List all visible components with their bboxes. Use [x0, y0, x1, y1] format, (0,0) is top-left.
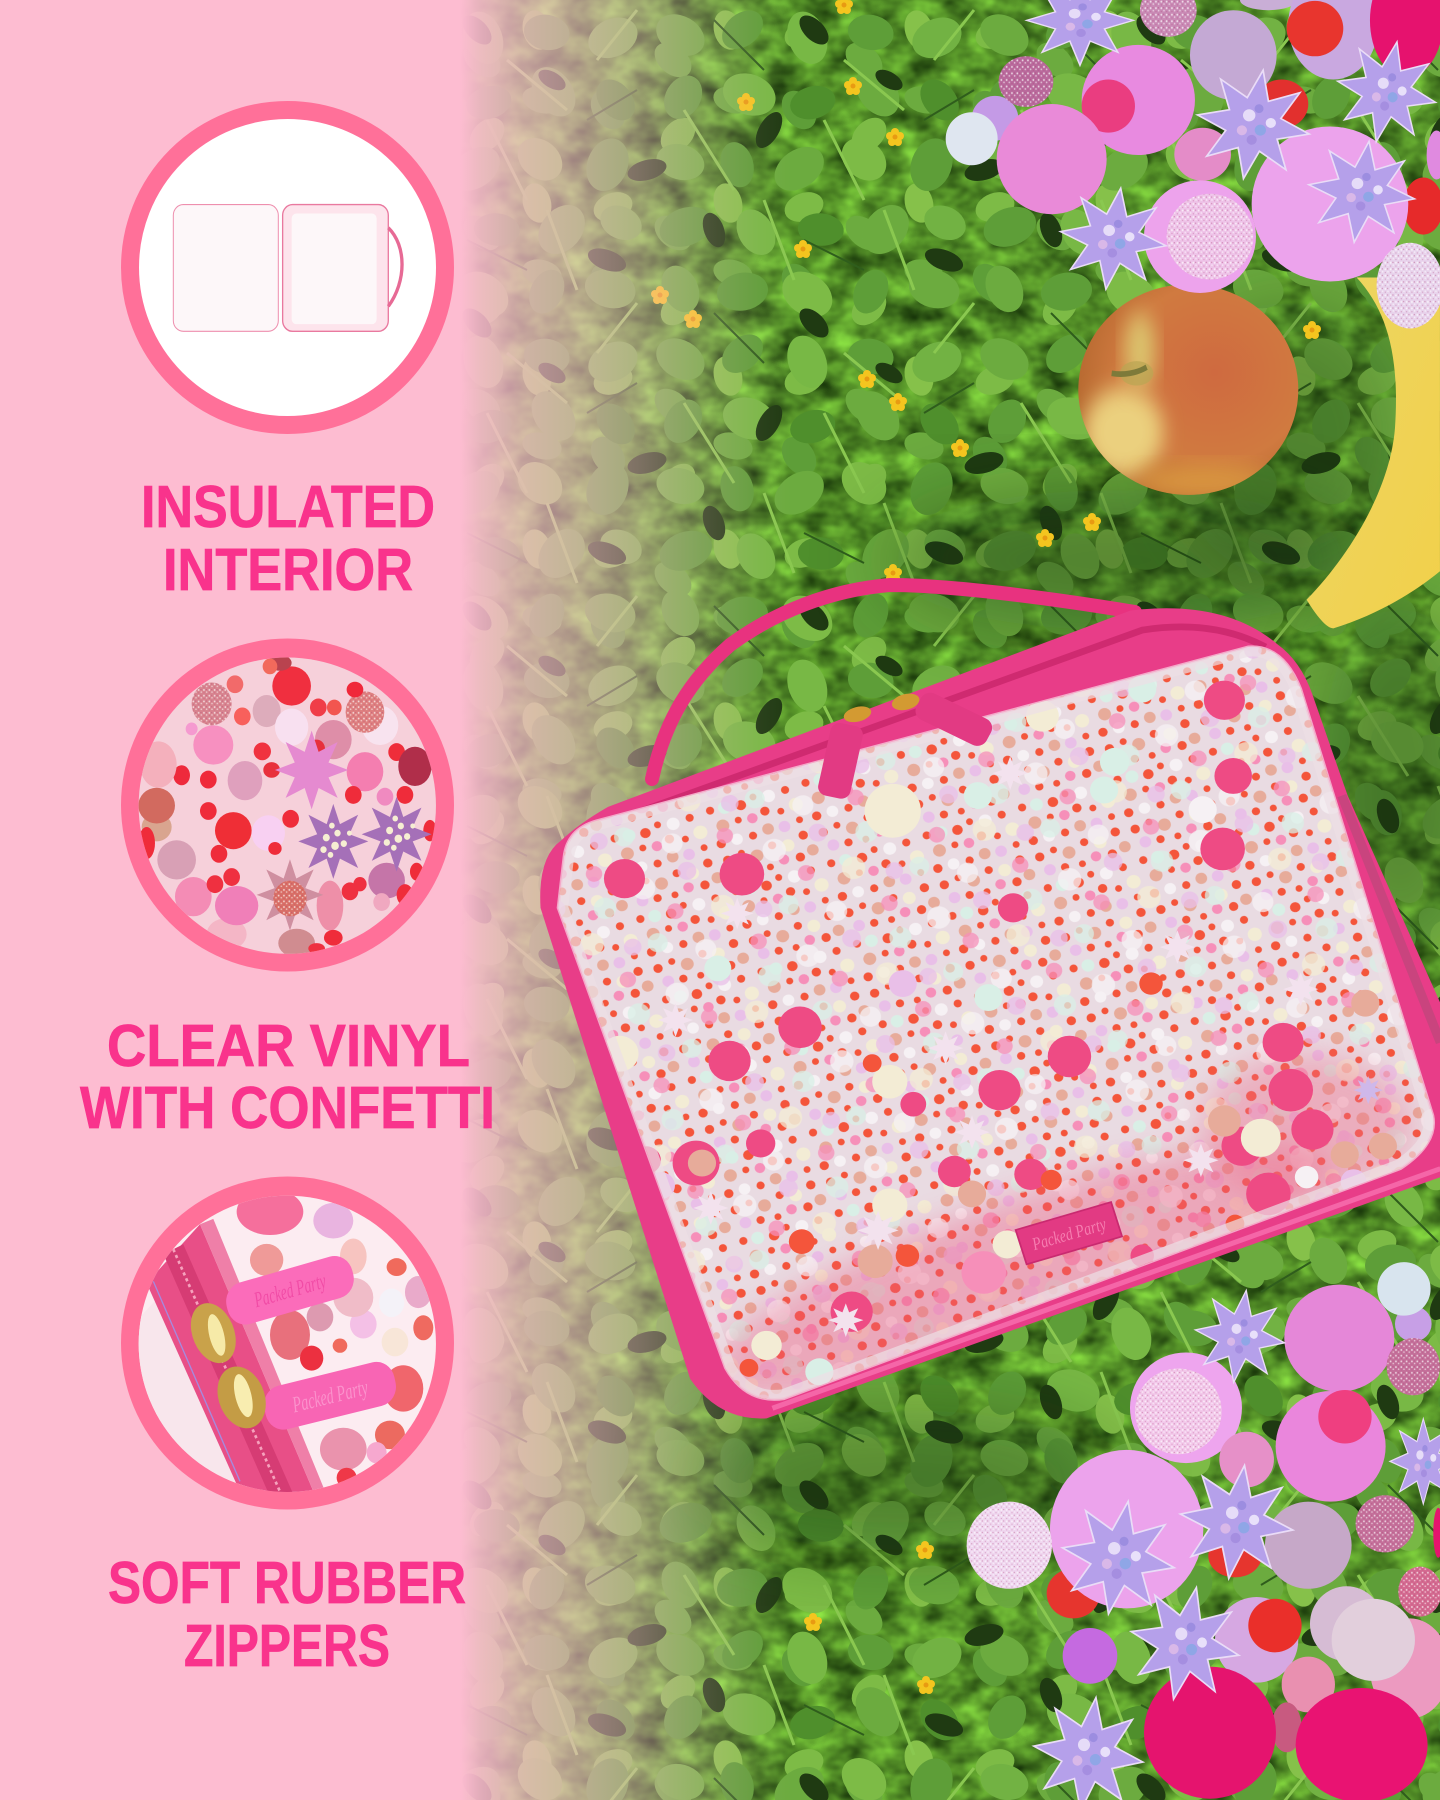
heading: clear vinyl with confetti: WITH CONFETTI — [80, 1075, 495, 1141]
clear window — [558, 647, 1434, 1399]
feature panel 2: clear vinyl with confetti — [80, 638, 495, 1141]
apple — [1078, 284, 1298, 498]
bottom-right confetti cluster — [967, 1262, 1440, 1800]
brand tag: Packed Party — [1029, 1214, 1109, 1254]
icon: ring with zipper close-up — [121, 1176, 454, 1510]
banana — [1307, 277, 1440, 628]
bag body — [540, 608, 1440, 1419]
icon: ring with zipper close-up: Packed Party — [289, 1374, 370, 1418]
heading: clear vinyl with confetti — [80, 1013, 495, 1141]
confetti fill — [558, 646, 1434, 1400]
feature panel 3: soft rubber zippers — [108, 1176, 466, 1679]
heading: soft rubber zippers — [108, 1550, 466, 1679]
top-right confetti cluster — [946, 0, 1440, 328]
heading: soft rubber zippers: ZIPPERS — [184, 1613, 390, 1679]
heading: insulated interior — [141, 474, 435, 603]
icon: ring with open lunch box — [130, 110, 445, 425]
side gusset — [1342, 796, 1440, 1042]
bottom piping highlight — [772, 1169, 1440, 1408]
brand tag — [1016, 1202, 1122, 1264]
icon: ring with confetti close-up — [121, 638, 454, 972]
heading: soft rubber zippers: SOFT RUBBER — [108, 1550, 466, 1616]
lunch box with clear confetti window — [520, 608, 1440, 1448]
feature panel 1: insulated interior — [130, 110, 445, 603]
heading: insulated interior: INSULATED — [141, 474, 435, 540]
lunch box handle — [652, 585, 1135, 779]
left pink fade over grass — [0, 0, 800, 1800]
photo: grass lawn background — [440, 0, 1440, 1800]
zipper pulls — [816, 689, 996, 800]
icon: ring with zipper close-up: Packed Party — [251, 1268, 329, 1313]
zipper track — [614, 627, 1265, 821]
heading: clear vinyl with confetti: CLEAR VINYL — [107, 1013, 470, 1079]
heading: insulated interior: INTERIOR — [163, 537, 413, 603]
